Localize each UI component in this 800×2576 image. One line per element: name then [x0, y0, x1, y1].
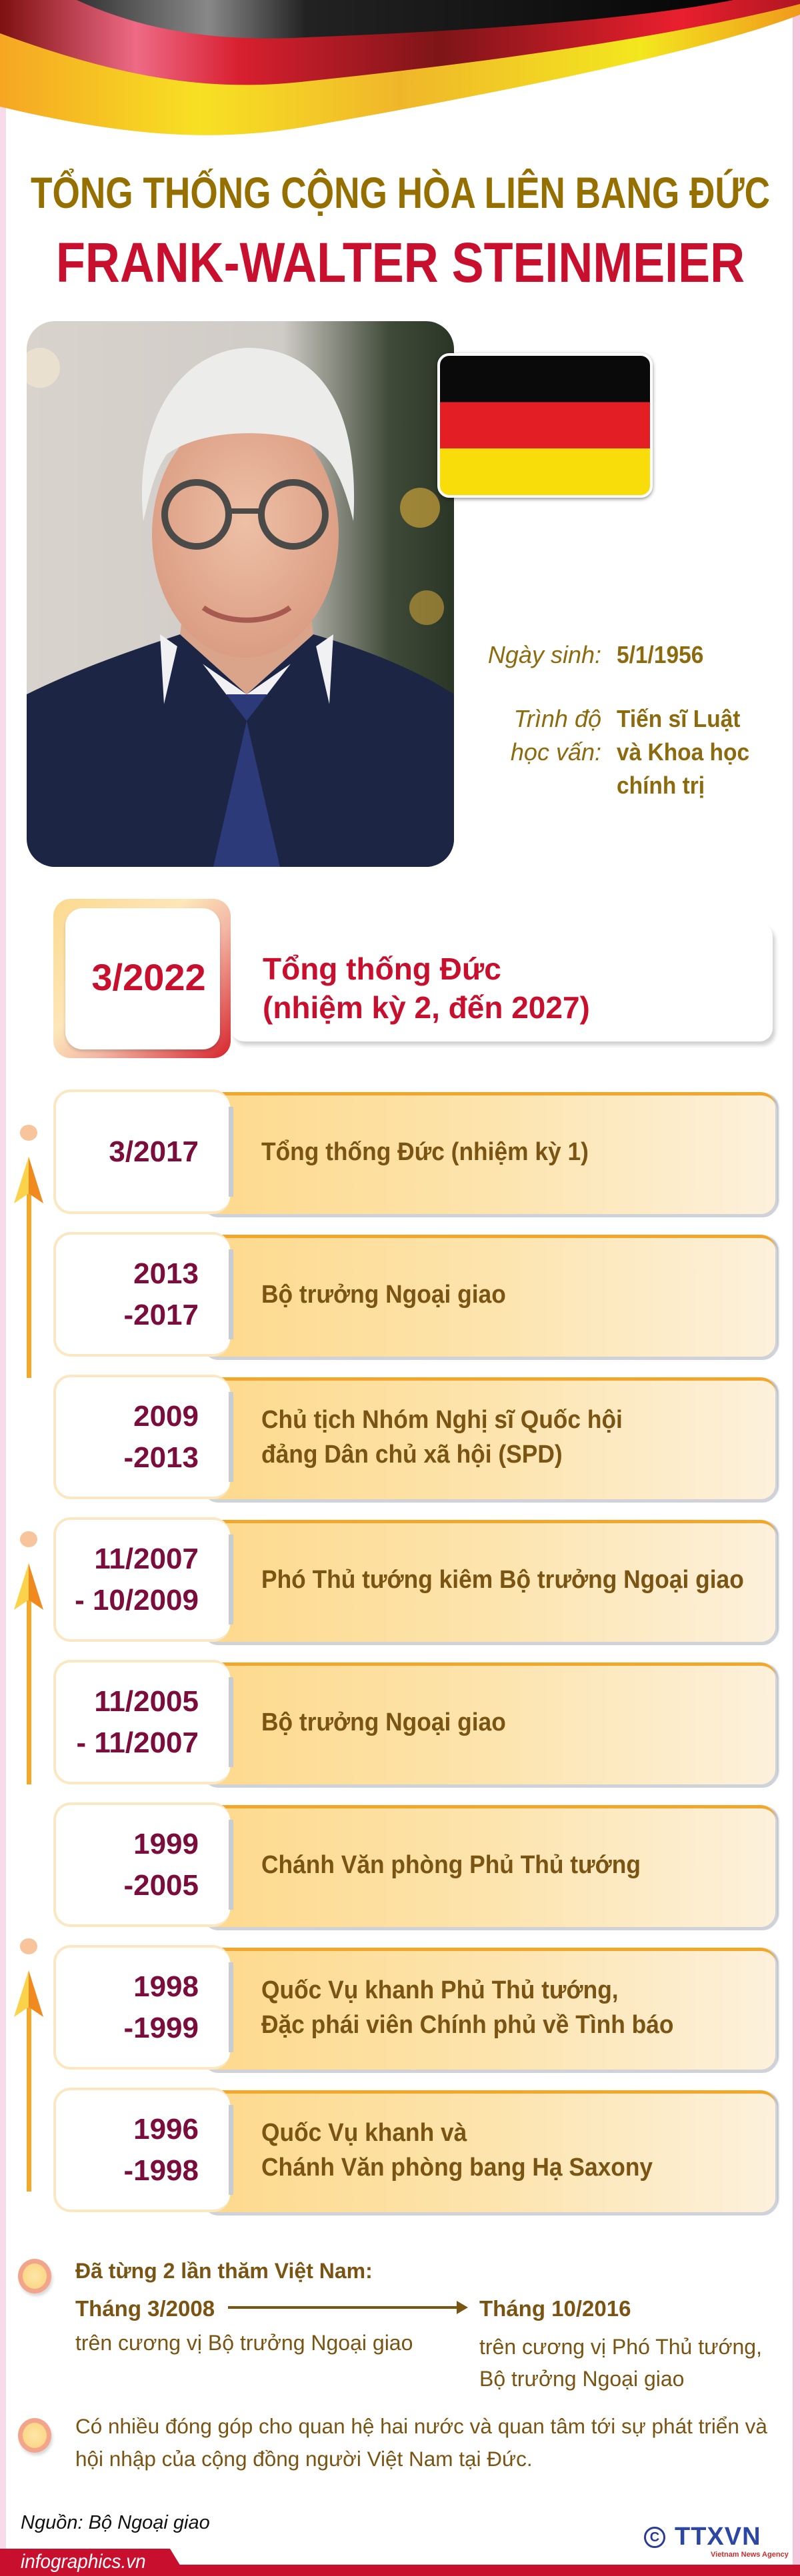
logo: TTXVN: Vietnam News Agency [711, 2551, 789, 2559]
visits to Vietnam: Bộ trưởng Ngoại giao [479, 2367, 684, 2391]
timeline item: 1998-1999: -1999 [123, 2011, 199, 2044]
visits to Vietnam: Tháng 10/2016 [479, 2296, 631, 2321]
timeline item: 2009-2013 [53, 1375, 780, 1503]
timeline item: 2013-2017: 2013 [133, 1257, 199, 1290]
logo: TTXVN: TTXVN [675, 2523, 761, 2551]
footer bar [0, 2565, 800, 2576]
timeline item: 1996-1998: -1998 [123, 2154, 199, 2187]
source: Nguồn: Bộ Ngoại giao [21, 2512, 210, 2533]
visits to Vietnam: trên cương vị Bộ trưởng Ngoại giao [75, 2331, 413, 2355]
info: education: học vấn: [511, 738, 601, 766]
icon: germany flag [437, 353, 653, 498]
icon: bullet 1 [18, 2259, 51, 2293]
timeline item: 1998-1999: Quốc Vụ khanh Phủ Thủ tướng, [261, 1976, 619, 2004]
info: birth date [488, 641, 703, 668]
portrait photo [27, 321, 454, 867]
page border left [0, 0, 6, 2576]
arrow: group 3 [14, 1938, 43, 2192]
visits to Vietnam: Tháng 3/2008 [75, 2296, 215, 2321]
timeline item: 11/2005-11/2007: Bộ trưởng Ngoại giao [261, 1708, 506, 1736]
visits to Vietnam: Đã từng 2 lần thăm Việt Nam: [75, 2259, 373, 2283]
footer tab: infographics.vn [0, 2549, 180, 2572]
timeline item: 11/2005-11/2007: 11/2005 [94, 1684, 199, 1718]
arrow: group 1 [14, 1125, 43, 1378]
timeline item: 2009-2013: đảng Dân chủ xã hội (SPD) [261, 1441, 563, 1469]
arrow: group 2 [14, 1531, 43, 1784]
timeline item: 1998-1999 [53, 1945, 780, 2073]
visits to Vietnam: trên cương vị Phó Thủ tướng, [479, 2335, 762, 2359]
timeline item: 1996-1998 [53, 2088, 780, 2216]
date: 3/2022 [91, 956, 206, 998]
timeline item: 11/2005-11/2007: - 11/2007 [76, 1726, 199, 1759]
arrow [228, 2301, 468, 2314]
logo: TTXVN [644, 2523, 789, 2559]
timeline item: 1999-2005: Chánh Văn phòng Phủ Thủ tướng [261, 1851, 641, 1879]
timeline item: 2013-2017: -2017 [123, 1298, 199, 1331]
timeline item: 3/2017: 3/2017 [109, 1135, 199, 1167]
timeline item: 1998-1999: 1998 [133, 1970, 199, 2003]
title [31, 168, 770, 287]
timeline item: 1999-2005 [53, 1802, 780, 1930]
timeline item: 2009-2013: 2009 [133, 1399, 199, 1433]
info: birth date: Ngày sinh: [488, 641, 601, 668]
icon: bullet 2 [18, 2418, 51, 2453]
timeline item: 11/2007-10/2009: 11/2007 [94, 1542, 199, 1575]
timeline item: 11/2007-10/2009 [53, 1517, 780, 1645]
timeline item: 3/2017 [53, 1089, 780, 1217]
flag wave banner [0, 0, 800, 135]
timeline item: 1999-2005: 1999 [133, 1827, 199, 1860]
title text [263, 952, 590, 1025]
title text: (nhiệm kỳ 2, đến 2027) [263, 990, 590, 1025]
timeline item: 1996-1998: Chánh Văn phòng bang Hạ Saxony [261, 2154, 653, 2182]
info: education [511, 705, 749, 799]
timeline item: 1996-1998: Quốc Vụ khanh và [261, 2119, 467, 2147]
timeline item: 11/2007-10/2009: Phó Thủ tướng kiêm Bộ trưởng Ngoại giao [261, 1566, 744, 1594]
info: education: Tiến sĩ Luật [617, 705, 740, 732]
highlight: 3/2022 [53, 899, 777, 1058]
info: education: Trình độ [514, 705, 601, 732]
timeline item: 11/2005-11/2007 [53, 1660, 780, 1788]
page border right [793, 0, 800, 2576]
logo: TTXVN: C [650, 2530, 659, 2545]
timeline item: 2013-2017 [53, 1232, 780, 1360]
timeline item: 11/2007-10/2009: - 10/2009 [75, 1583, 199, 1616]
timeline item: 2009-2013: -2013 [123, 1441, 199, 1474]
title text: Tổng thống Đức [263, 952, 501, 986]
timeline item: 2009-2013: Chủ tịch Nhóm Nghị sĩ Quốc hội [261, 1406, 623, 1434]
timeline item: 1996-1998: 1996 [133, 2112, 199, 2146]
timeline item: 1999-2005: -2005 [123, 1868, 199, 1902]
contribution text: Có nhiều đóng góp cho quan hệ hai nước và quan tâm tới sự phát triển và [75, 2414, 767, 2438]
timeline item: 2013-2017: Bộ trưởng Ngoại giao [261, 1281, 506, 1309]
info: education: và Khoa học [617, 738, 749, 766]
footer tab: infographics.vn: infographics.vn [21, 2551, 146, 2573]
visits to Vietnam [75, 2259, 762, 2391]
contribution text: hội nhập của cộng đồng người Việt Nam tại Đức. [75, 2447, 533, 2471]
timeline item: 1998-1999: Đặc phái viên Chính phủ về Tình báo [261, 2011, 674, 2039]
info: birth date: 5/1/1956 [617, 641, 703, 668]
info: education: chính trị [617, 772, 705, 799]
timeline item: 3/2017: Tổng thống Đức (nhiệm kỳ 1) [261, 1138, 589, 1166]
contribution text [75, 2414, 767, 2471]
